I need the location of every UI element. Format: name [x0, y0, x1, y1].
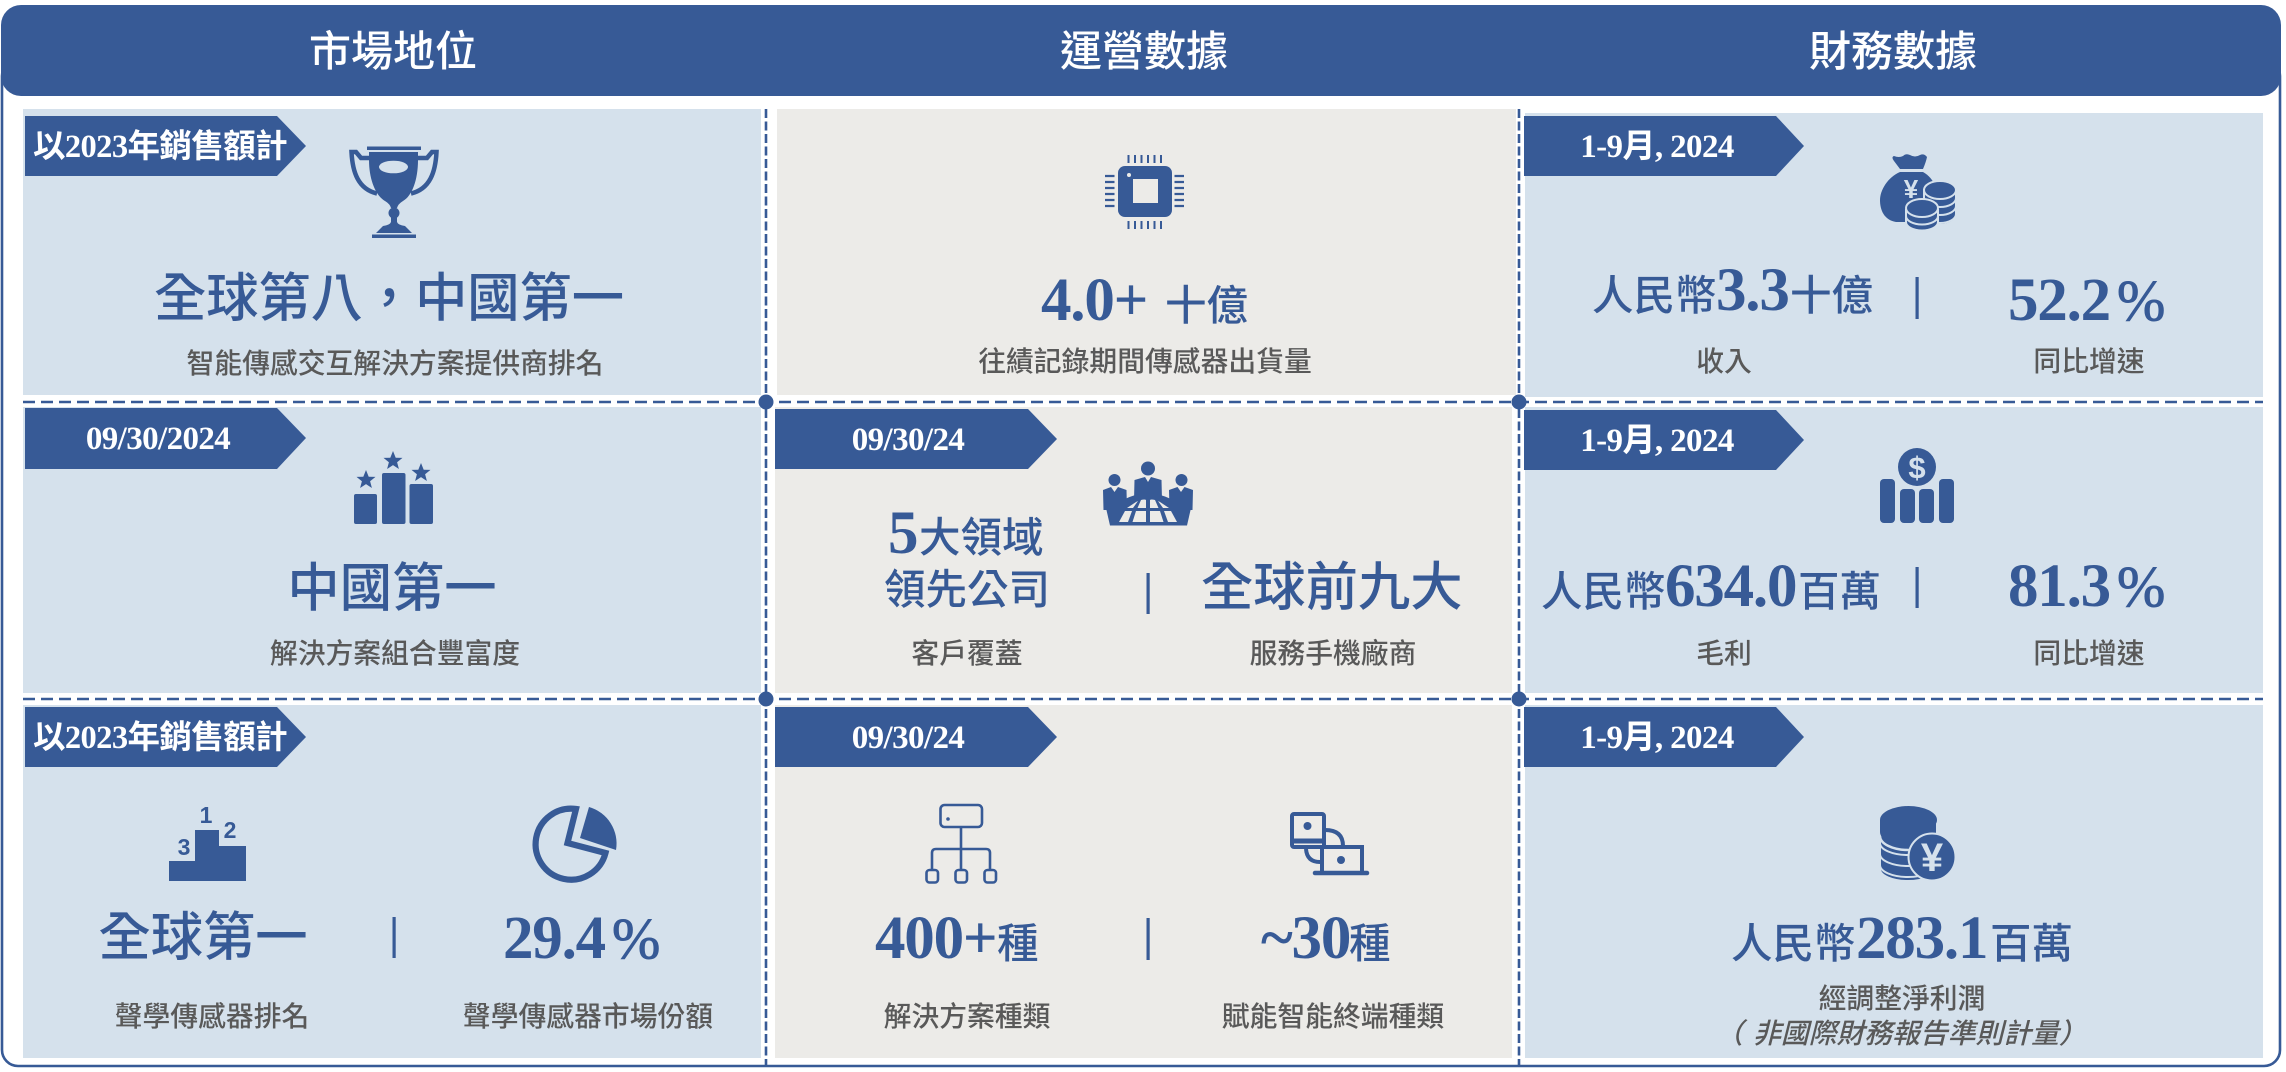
panel: shipment volume — [777, 109, 1516, 395]
ribbon: period: 1-9月, 2024 — [1580, 423, 1734, 459]
headline: 中國第一 — [287, 546, 497, 622]
icon: podium: 1 — [200, 802, 213, 828]
headline: 全球第一 — [98, 895, 308, 971]
value: 4.0+ — [1041, 267, 1147, 334]
panel: acoustic sensors — [23, 705, 761, 1058]
growth value: % — [2117, 554, 2165, 619]
value: 人民幣 — [1541, 558, 1666, 618]
panel: china first — [23, 407, 761, 693]
solution count: 400+ — [875, 905, 996, 972]
panel: global rank — [23, 109, 761, 395]
caption: solution types: 解決方案種類 — [884, 995, 1051, 1035]
left value: 大領域 — [919, 504, 1044, 564]
ribbon: period — [1524, 116, 1804, 176]
value: 十億 — [1165, 272, 1248, 332]
ribbon: period — [1524, 707, 1804, 767]
solution count: 種 — [997, 910, 1039, 970]
value: 人民幣 — [1731, 910, 1856, 970]
caption: gross profit: 毛利 — [1696, 632, 1752, 672]
caption: adjusted net profit: 經調整淨利潤 — [1819, 977, 1985, 1017]
value: 634.0 — [1665, 553, 1796, 620]
panel: adjusted net profit — [1524, 705, 2263, 1058]
terminal count: 種 — [1349, 910, 1391, 970]
icon: stars over bars — [354, 451, 433, 524]
icon: trophy — [352, 146, 436, 238]
panel: solution types — [775, 705, 1512, 1058]
divider — [1146, 918, 1150, 960]
icon: coin stack with yen — [1880, 806, 1956, 881]
caption: revenue: 收入 — [1696, 340, 1752, 380]
caption: 智能傳感交互解決方案提供商排名 — [187, 342, 603, 382]
value: 3.3 — [1716, 257, 1789, 324]
caption: terminal types: 賦能智能終端種類 — [1222, 995, 1444, 1035]
value: 283.1 — [1856, 905, 1987, 972]
icon: money bag and coins — [1880, 154, 1956, 230]
ribbon: date: 09/30/2024 — [86, 421, 230, 457]
icon: pie chart — [536, 807, 617, 880]
icon: chip — [1105, 155, 1184, 229]
right value: 全球前九大 — [1201, 545, 1462, 621]
ribbon: 2023 sales: 以2023年銷售額計 — [33, 719, 287, 756]
caption: yoy growth: 同比增速 — [2033, 340, 2145, 380]
panel: gross profit — [1524, 407, 2263, 693]
left value second line: 領先公司 — [884, 556, 1050, 616]
ribbon: period — [1524, 410, 1804, 470]
icon: money bag and coins: ¥ — [1904, 174, 1919, 204]
icon: podium — [169, 802, 246, 881]
ribbon: period: 1-9月, 2024 — [1580, 129, 1734, 165]
icon: dollar and bars: $ — [1908, 450, 1926, 485]
divider — [392, 917, 396, 958]
caption: handset vendors: 服務手機廠商 — [1250, 632, 1416, 672]
ribbon: date: 09/30/24 — [852, 720, 964, 756]
icon: people around globe — [1103, 462, 1193, 526]
growth value: % — [2117, 268, 2165, 333]
ribbon: 2023 sales: 以2023年銷售額計 — [33, 128, 287, 165]
value: 百萬 — [1798, 558, 1881, 618]
value: 人民幣 — [1592, 262, 1717, 322]
headline: 全球第八，中國第一 — [154, 256, 624, 332]
caption: market share: 聲學傳感器市場份額 — [463, 995, 713, 1035]
ribbon: date — [775, 409, 1057, 469]
value: 十億 — [1790, 262, 1873, 322]
caption: 解決方案組合豐富度 — [270, 632, 520, 672]
terminal count: ~30 — [1261, 905, 1350, 972]
ribbon: date — [775, 707, 1057, 767]
caption: yoy growth: 同比增速 — [2033, 632, 2145, 672]
ribbon: period: 1-9月, 2024 — [1580, 720, 1734, 756]
ribbon: date — [25, 408, 306, 469]
icon: connected devices — [1292, 814, 1367, 873]
icon: coin stack with yen: ¥ — [1921, 836, 1944, 880]
ribbon: 2023 sales — [25, 116, 306, 176]
ribbon: 2023 sales — [25, 707, 306, 767]
divider — [1916, 277, 1919, 319]
heading: market position: 市場地位 — [309, 18, 477, 79]
share value: % — [612, 906, 660, 971]
divider — [1146, 573, 1150, 614]
icon: dollar and bars — [1880, 448, 1954, 523]
heading: operating data: 運營數據 — [1060, 18, 1228, 79]
icon: podium: 2 — [224, 817, 236, 843]
divider — [1916, 567, 1919, 608]
share value: 29.4 — [503, 905, 606, 972]
growth value: 52.2 — [2008, 267, 2110, 334]
value: 百萬 — [1990, 910, 2073, 970]
left value: 5 — [888, 500, 917, 567]
ribbon: date: 09/30/24 — [852, 422, 964, 458]
panel: revenue — [1524, 113, 2263, 397]
caption: customer coverage: 客戶覆蓋 — [911, 632, 1023, 672]
caption: acoustic sensor rank: 聲學傳感器排名 — [115, 995, 309, 1035]
header bar — [1, 5, 2281, 96]
icon: podium: 3 — [178, 834, 190, 860]
caption: 往績記錄期間傳感器出貨量 — [978, 340, 1312, 380]
icon: hierarchy tree — [926, 805, 996, 882]
panel: customer coverage — [775, 407, 1512, 693]
caption: non-IFRS: （ 非國際財務報告準則計量） — [1715, 1012, 2087, 1052]
growth value: 81.3 — [2008, 553, 2110, 620]
heading: financial data: 財務數據 — [1809, 18, 1977, 79]
